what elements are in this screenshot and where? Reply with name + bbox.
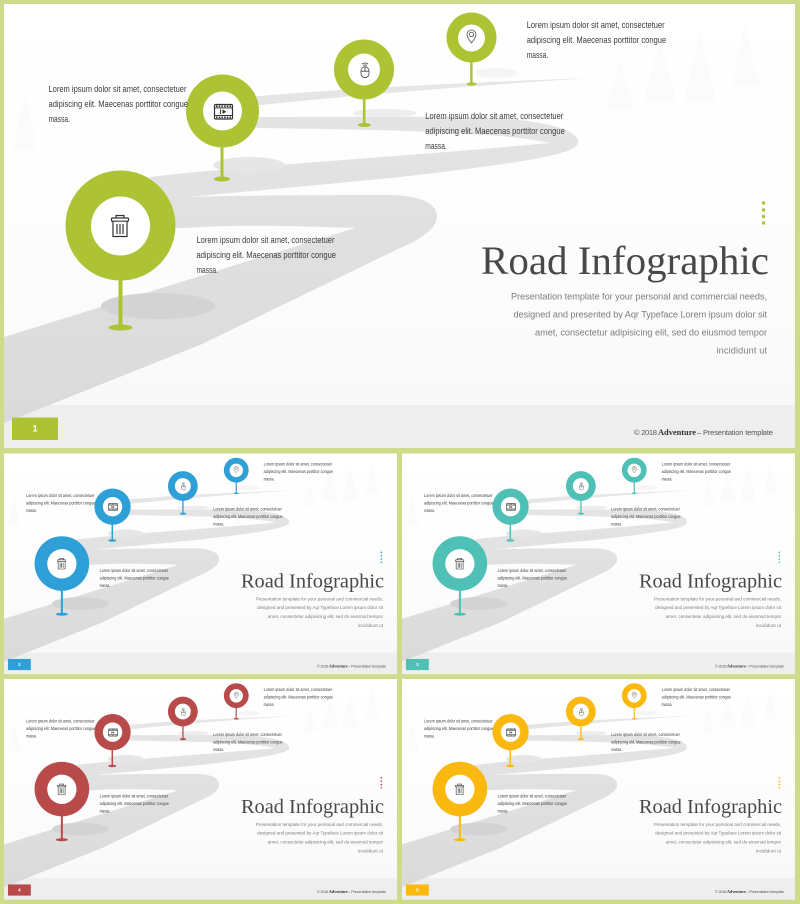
text block 1: massa. xyxy=(26,508,37,513)
subtitle xyxy=(256,596,384,628)
text block 3: Lorem ipsum dolor sit amet, consectetuer xyxy=(425,111,563,121)
text block 3: adipiscing elit. Maecenas porttitor congue xyxy=(213,514,283,519)
subtitle xyxy=(654,596,782,628)
text block 4: adipiscing elit. Maecenas porttitor congue xyxy=(498,801,567,806)
pin 4: location xyxy=(622,458,647,494)
pin 2: film xyxy=(186,74,259,182)
panel: red slide xyxy=(4,679,397,900)
text block 1: adipiscing elit. Maecenas porttitor congue xyxy=(48,99,188,109)
text block 3 xyxy=(611,732,681,752)
text block 2: Lorem ipsum dolor sit amet, consectetuer xyxy=(527,20,665,30)
text block 3: massa. xyxy=(425,141,447,151)
text block 4: massa. xyxy=(196,265,218,275)
footer: © 2018 xyxy=(715,890,726,894)
text block 2 xyxy=(662,461,731,481)
pin 1: trash xyxy=(66,170,176,330)
subtitle: incididunt ut xyxy=(756,623,782,628)
subtitle: incididunt ut xyxy=(358,849,384,854)
text block 3: Lorem ipsum dolor sit amet, consectetuer xyxy=(611,732,680,737)
text block 4: Lorem ipsum dolor sit amet, consectetuer xyxy=(196,235,335,245)
footer: © 2018 xyxy=(634,428,657,437)
text block 2: adipiscing elit. Maecenas porttitor congue xyxy=(662,694,731,699)
pin 2: film xyxy=(94,714,131,767)
footer: – Presentation template xyxy=(697,428,773,437)
subtitle: amet, consectetur adipisicing elit, sed do eiusmod tempor xyxy=(268,840,384,845)
text block 1: adipiscing elit. Maecenas porttitor congue xyxy=(26,726,96,731)
subtitle: designed and presented by Aqr Typeface Lorem ipsum dolor sit xyxy=(257,831,384,836)
pin 2: film xyxy=(492,489,529,542)
subtitle: amet, consectetur adipisicing elit, sed do eiusmod tempor xyxy=(666,614,782,619)
pin shadows xyxy=(52,485,259,610)
subtitle: Presentation template for your personal and commercial needs, xyxy=(256,596,383,601)
text block 2 xyxy=(527,20,666,60)
text block 3 xyxy=(425,111,565,151)
footer: – Presentation template xyxy=(746,890,784,894)
page badge: 5 xyxy=(416,887,419,892)
subtitle: Presentation template for your personal and commercial needs, xyxy=(511,292,767,302)
title: Road Infographic xyxy=(639,571,782,593)
footer: Adventure xyxy=(727,664,746,669)
text block 4 xyxy=(498,568,567,588)
text block 2: adipiscing elit. Maecenas porttitor congue xyxy=(264,694,333,699)
dots xyxy=(380,777,382,789)
dots xyxy=(778,777,780,789)
text block 3: massa. xyxy=(611,747,622,752)
text block 1: Lorem ipsum dolor sit amet, consectetuer xyxy=(48,84,187,94)
text block 2: Lorem ipsum dolor sit amet, consectetuer xyxy=(264,687,333,692)
footer xyxy=(634,428,773,437)
page badge xyxy=(8,659,31,670)
subtitle: incididunt ut xyxy=(716,346,767,356)
text block 3: massa. xyxy=(213,522,224,527)
text block 1 xyxy=(48,84,188,124)
text block 1: Lorem ipsum dolor sit amet, consectetuer xyxy=(424,719,493,724)
text block 3: adipiscing elit. Maecenas porttitor congue xyxy=(425,126,565,136)
text block 4: adipiscing elit. Maecenas porttitor congue xyxy=(498,576,567,581)
text block 3: adipiscing elit. Maecenas porttitor congue xyxy=(611,740,681,745)
text block 3: adipiscing elit. Maecenas porttitor congue xyxy=(611,514,681,519)
pin 1: trash xyxy=(35,762,89,841)
text block 4: adipiscing elit. Maecenas porttitor congue xyxy=(196,250,336,260)
pin 4: location xyxy=(224,683,249,720)
subtitle: designed and presented by Aqr Typeface Lorem ipsum dolor sit xyxy=(257,605,384,610)
text block 4: adipiscing elit. Maecenas porttitor congue xyxy=(100,801,169,806)
pin 3: mouse xyxy=(168,697,198,740)
pin 3: mouse xyxy=(566,697,596,740)
text block 2: Lorem ipsum dolor sit amet, consectetuer xyxy=(264,461,333,466)
text block 1: massa. xyxy=(26,734,37,739)
text block 2: Lorem ipsum dolor sit amet, consectetuer xyxy=(662,461,731,466)
subtitle: amet, consectetur adipisicing elit, sed do eiusmod tempor xyxy=(666,840,782,845)
text block 1 xyxy=(424,719,494,739)
subtitle: Presentation template for your personal and commercial needs, xyxy=(654,596,781,601)
text block 4: adipiscing elit. Maecenas porttitor congue xyxy=(100,576,169,581)
pin 1: trash xyxy=(35,536,89,616)
text block 1: massa. xyxy=(424,508,435,513)
text block 4 xyxy=(498,794,567,814)
panel: yellow slide xyxy=(402,679,795,900)
page badge: 4 xyxy=(18,887,21,892)
dots xyxy=(778,552,780,563)
text block 2 xyxy=(264,461,333,481)
text block 1: massa. xyxy=(424,734,435,739)
text block 3: Lorem ipsum dolor sit amet, consectetuer xyxy=(213,507,282,512)
footer xyxy=(715,889,784,894)
title: Road Infographic xyxy=(639,796,782,818)
text block 1 xyxy=(26,719,96,739)
pin 4: location xyxy=(446,12,496,86)
footer xyxy=(317,889,386,894)
subtitle: Presentation template for your personal and commercial needs, xyxy=(654,822,781,827)
subtitle: designed and presented by Aqr Typeface Lorem ipsum dolor sit xyxy=(514,310,767,320)
text block 2: massa. xyxy=(662,702,672,707)
panel: main green slide xyxy=(4,4,795,448)
subtitle: incididunt ut xyxy=(756,849,782,854)
dots xyxy=(380,552,382,563)
subtitle: amet, consectetur adipisicing elit, sed do eiusmod tempor xyxy=(535,328,767,338)
footer: Adventure xyxy=(329,889,348,894)
text block 4: Lorem ipsum dolor sit amet, consectetuer xyxy=(100,568,169,573)
subtitle: designed and presented by Aqr Typeface Lorem ipsum dolor sit xyxy=(655,831,782,836)
subtitle xyxy=(654,822,782,854)
pin 3: mouse xyxy=(566,471,596,515)
text block 2 xyxy=(264,687,333,707)
text block 4: massa. xyxy=(100,809,110,814)
text block 3 xyxy=(213,732,283,752)
footer xyxy=(317,664,386,669)
text block 3 xyxy=(213,507,283,527)
title: Road Infographic xyxy=(241,796,384,818)
text block 4 xyxy=(196,235,336,275)
text block 2: massa. xyxy=(527,50,548,60)
subtitle: designed and presented by Aqr Typeface Lorem ipsum dolor sit xyxy=(655,605,782,610)
pin shadows xyxy=(101,68,517,319)
text block 2 xyxy=(662,687,731,707)
page badge: 3 xyxy=(416,662,419,667)
text block 2: adipiscing elit. Maecenas porttitor congue xyxy=(527,35,666,45)
footer: – Presentation template xyxy=(746,665,784,669)
text block 1: Lorem ipsum dolor sit amet, consectetuer xyxy=(424,493,493,498)
page badge xyxy=(8,884,31,896)
text block 1: massa. xyxy=(48,114,70,124)
pin 1: trash xyxy=(433,536,487,616)
panel: blue slide xyxy=(4,454,397,674)
text block 4: Lorem ipsum dolor sit amet, consectetuer xyxy=(100,794,169,799)
page badge xyxy=(406,659,429,670)
footer: Adventure xyxy=(727,889,746,894)
page badge: 1 xyxy=(32,424,38,434)
footer: © 2018 xyxy=(317,890,328,894)
text block 3: Lorem ipsum dolor sit amet, consectetuer xyxy=(611,507,680,512)
text block 1: Lorem ipsum dolor sit amet, consectetuer xyxy=(26,719,95,724)
text block 1: adipiscing elit. Maecenas porttitor congue xyxy=(26,501,96,506)
pin 2: film xyxy=(94,489,131,542)
text block 4: massa. xyxy=(498,583,508,588)
text block 1 xyxy=(26,493,96,513)
text block 4: massa. xyxy=(498,809,508,814)
text block 1 xyxy=(424,493,494,513)
text block 2: adipiscing elit. Maecenas porttitor congue xyxy=(662,469,731,474)
page badge xyxy=(12,418,58,440)
page badge xyxy=(406,884,429,896)
text block 4 xyxy=(100,794,169,814)
text block 4: massa. xyxy=(100,583,110,588)
subtitle: incididunt ut xyxy=(358,623,384,628)
text block 1: adipiscing elit. Maecenas porttitor congue xyxy=(424,726,494,731)
text block 1: adipiscing elit. Maecenas porttitor congue xyxy=(424,501,494,506)
footer: – Presentation template xyxy=(348,665,386,669)
text block 3 xyxy=(611,507,681,527)
text block 1: Lorem ipsum dolor sit amet, consectetuer xyxy=(26,493,95,498)
pin 4: location xyxy=(224,458,249,494)
footer: – Presentation template xyxy=(348,890,386,894)
title: Road Infographic xyxy=(241,571,384,593)
text block 2: massa. xyxy=(662,476,672,481)
pin shadows xyxy=(450,485,657,610)
footer: © 2018 xyxy=(317,665,328,669)
subtitle: Presentation template for your personal and commercial needs, xyxy=(256,822,383,827)
pin shadows xyxy=(450,711,657,835)
footer: Adventure xyxy=(658,428,696,437)
footer xyxy=(715,664,784,669)
subtitle xyxy=(256,822,384,854)
title: Road Infographic xyxy=(481,238,769,283)
text block 3: adipiscing elit. Maecenas porttitor congue xyxy=(213,740,283,745)
text block 3: massa. xyxy=(611,522,622,527)
text block 4: Lorem ipsum dolor sit amet, consectetuer xyxy=(498,568,567,573)
text block 3: massa. xyxy=(213,747,224,752)
pin 2: film xyxy=(492,714,529,767)
panel: teal slide xyxy=(402,454,795,674)
dots xyxy=(762,201,765,225)
text block 4: Lorem ipsum dolor sit amet, consectetuer xyxy=(498,794,567,799)
text block 2: massa. xyxy=(264,476,274,481)
pin 3: mouse xyxy=(168,471,198,515)
pin 4: location xyxy=(622,683,647,720)
subtitle xyxy=(511,292,767,356)
text block 2: adipiscing elit. Maecenas porttitor congue xyxy=(264,469,333,474)
text block 3: Lorem ipsum dolor sit amet, consectetuer xyxy=(213,732,282,737)
text block 2: Lorem ipsum dolor sit amet, consectetuer xyxy=(662,687,731,692)
page badge: 2 xyxy=(18,662,21,667)
pin 1: trash xyxy=(433,762,487,841)
text block 2: massa. xyxy=(264,702,274,707)
pin 3: mouse xyxy=(334,40,394,127)
subtitle: amet, consectetur adipisicing elit, sed do eiusmod tempor xyxy=(268,614,384,619)
text block 4 xyxy=(100,568,169,588)
footer: © 2018 xyxy=(715,665,726,669)
pin shadows xyxy=(52,711,259,835)
footer: Adventure xyxy=(329,664,348,669)
